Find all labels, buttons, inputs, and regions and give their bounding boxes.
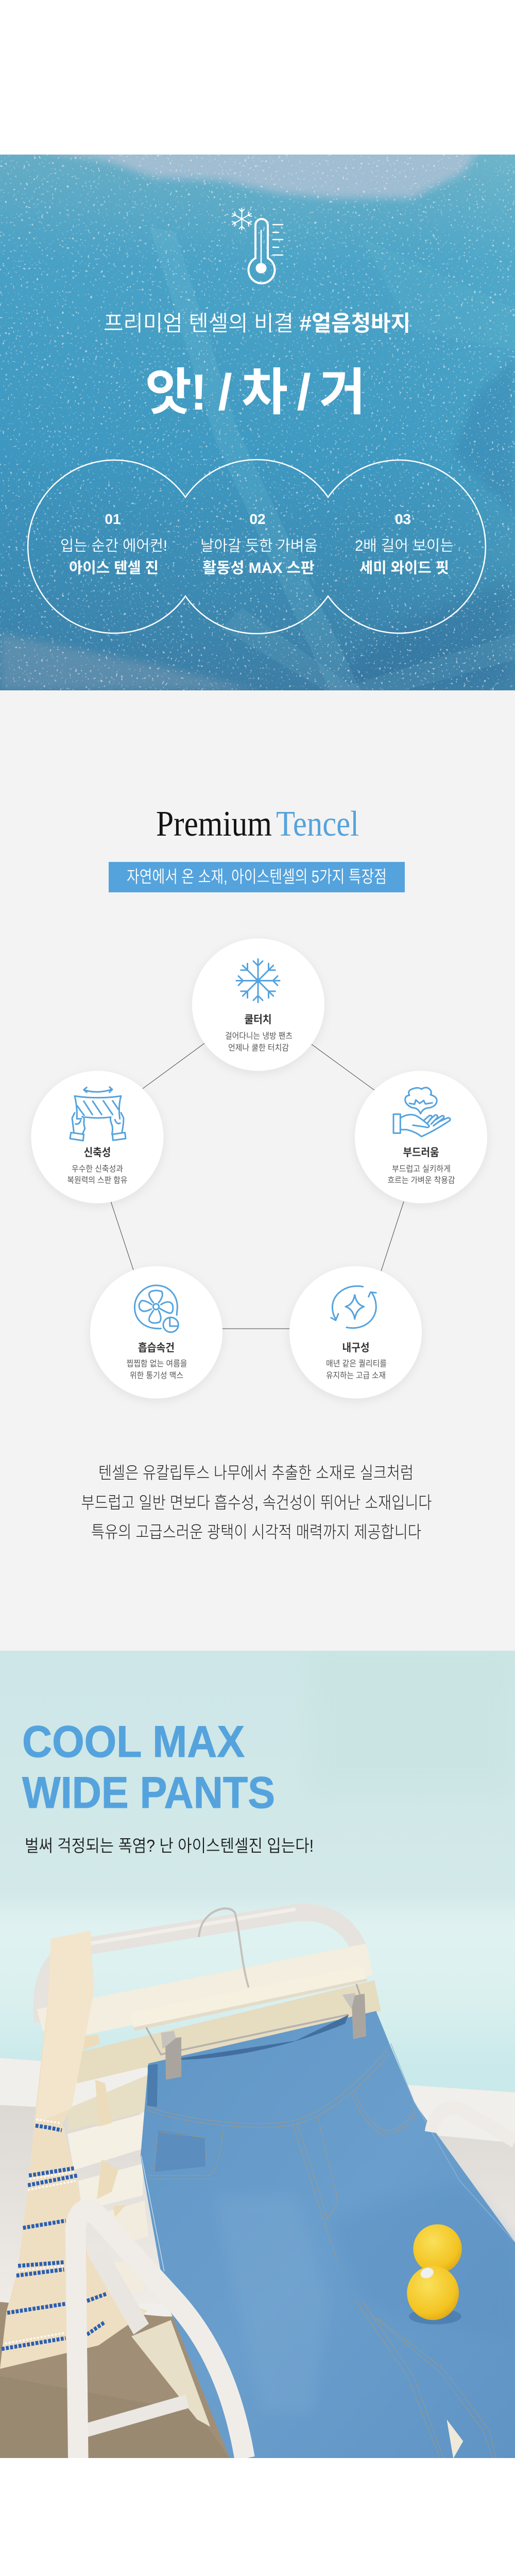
hero subtitle: 프리미엄 텐셀의 비결 #얼음청바지 [104, 311, 410, 335]
feature 02 [200, 511, 318, 577]
panel: ice hero [0, 149, 515, 706]
node: stretch: 복원력의 스판 함유 [67, 1176, 128, 1185]
node: durability [289, 1266, 422, 1398]
feature 01: 아이스 텐셀 진 [69, 560, 159, 577]
node: durability: 내구성 [342, 1342, 370, 1354]
photo subtitle: 벌써 걱정되는 폭염? 난 아이스텐셀진 입는다! [25, 1836, 314, 1855]
hero title: 거 [319, 364, 366, 420]
heading: premium tencel [156, 804, 359, 844]
hero title: ! [191, 364, 207, 420]
chair straps [37, 1943, 381, 2427]
feature 03: 2배 길어 보이는 [355, 538, 454, 554]
feature 03: 세미 와이드 핏 [359, 560, 449, 577]
lemons [407, 2224, 462, 2325]
banner: 자연에서 온 소재, 아이스텐셀의 5가지 특장점 [127, 867, 387, 886]
feature 03: 03 [395, 511, 411, 527]
node: softness: 부드럽고 실키하게 [392, 1164, 451, 1174]
feature 02: 02 [249, 511, 266, 527]
heading: cool max wide pants: COOL MAX [22, 1717, 245, 1767]
heading: premium tencel: Tencel [276, 804, 359, 844]
node: softness [355, 1071, 487, 1204]
hero title: / [297, 364, 311, 420]
node: cool touch: 걸어다니는 냉방 팬츠 [225, 1031, 293, 1041]
panel: premium tencel [0, 690, 515, 1651]
node: quick dry: 흡습속건 [138, 1342, 175, 1354]
node: stretch [31, 1071, 164, 1204]
node: stretch: 우수한 신축성과 [72, 1164, 123, 1174]
node: durability: 매년 같은 퀄리티를 [326, 1359, 387, 1368]
feature 02: 활동성 MAX 스판 [202, 560, 315, 577]
description text: 텐셀은 유칼립투스 나무에서 추출한 소재로 실크처럼 [98, 1463, 414, 1482]
icon: snowflake [236, 959, 280, 1003]
node: stretch: 신축성 [84, 1147, 111, 1159]
banner [109, 862, 405, 892]
icon: sparkle with arrows [331, 1286, 376, 1328]
node: cool touch [192, 939, 324, 1071]
icon: fan with clock [134, 1285, 178, 1332]
jeans [141, 2011, 515, 2459]
hero title: 차 [242, 364, 288, 420]
node: cool touch: 언제나 쿨한 터치감 [228, 1043, 289, 1053]
hanger [129, 1908, 367, 2055]
feature 01: 01 [105, 511, 121, 527]
feature 03 [355, 511, 454, 577]
node: softness: 부드러움 [403, 1147, 439, 1159]
heading: cool max wide pants [22, 1717, 275, 1818]
node: softness: 흐르는 가벼운 착용감 [387, 1176, 455, 1185]
node: quick dry: 위한 통기성 맥스 [130, 1371, 183, 1380]
node: cool touch: 쿨터치 [244, 1014, 272, 1026]
heading: cool max wide pants: WIDE PANTS [22, 1768, 275, 1818]
icon: cotton and hand [393, 1088, 450, 1137]
three linked circles outline [28, 460, 486, 634]
hanger clips [161, 1993, 366, 2080]
photo: chair, jeans and lemons [0, 1908, 515, 2459]
connector lines [111, 1043, 404, 1329]
description text: 부드럽고 일반 면보다 흡수성, 속건성이 뛰어난 소재입니다 [81, 1493, 432, 1512]
description text [81, 1463, 432, 1541]
node: quick dry: 찝찝함 없는 여름을 [127, 1359, 187, 1368]
description text: 특유의 고급스러운 광택이 시각적 매력까지 제공합니다 [91, 1522, 421, 1541]
panel: cool max photo [0, 1651, 515, 2459]
chair arm front [76, 2211, 245, 2459]
feature 01 [60, 511, 167, 577]
icon: stretching fabric [70, 1087, 126, 1141]
icon: thermometer and snowflake [231, 208, 283, 283]
node: quick dry [90, 1266, 222, 1398]
crochet bag [0, 1931, 148, 2369]
chair back rail [41, 1912, 358, 2022]
hero title: / [218, 364, 232, 420]
feature 01: 입는 순간 에어컨! [60, 537, 167, 554]
heading: premium tencel: Premium [156, 804, 272, 844]
hero title: 앗 [145, 364, 192, 420]
curb and wall [0, 2058, 515, 2459]
chair arm right [424, 2121, 514, 2147]
node: durability: 유지하는 고급 소재 [326, 1371, 386, 1380]
feature 02: 날아갈 듯한 가벼움 [200, 538, 318, 554]
